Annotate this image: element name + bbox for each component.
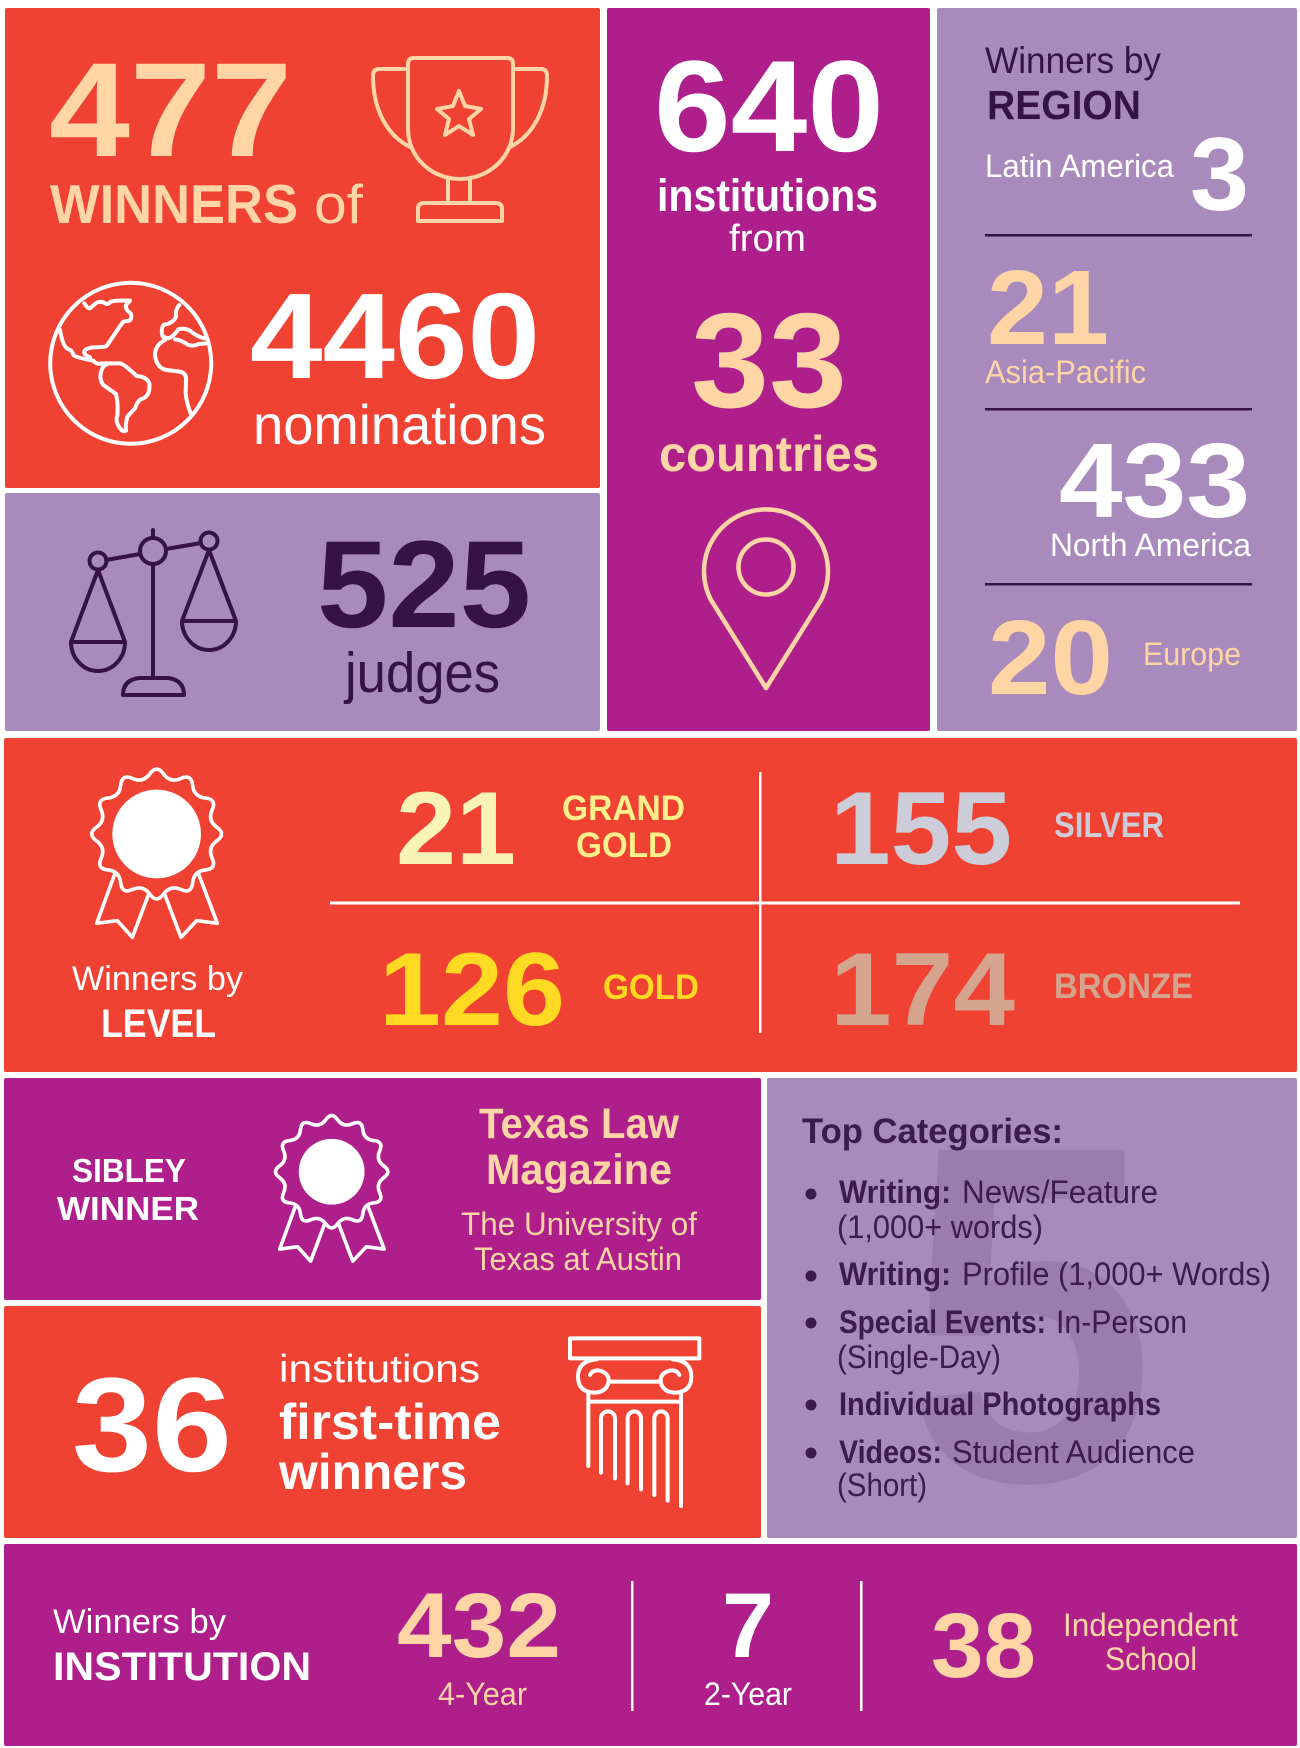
stat: silver 155	[830, 771, 1164, 887]
heading: winners by region: Winners by	[985, 40, 1161, 81]
heading: winners by institution	[53, 1603, 311, 1689]
stat: grand gold 21: 21	[396, 771, 516, 887]
list: categories: Student Audience	[952, 1434, 1195, 1470]
stat: 36 first-time winners: institutions	[279, 1348, 480, 1391]
stat: 640 institutions: institutions	[657, 170, 878, 221]
stat: grand gold 21: GRAND	[562, 789, 685, 828]
stat: 38 independent school: 38	[931, 1595, 1036, 1697]
stat: 640 institutions	[654, 33, 884, 260]
list: categories: News/Feature	[962, 1174, 1158, 1210]
text: Texas Law Magazine: Magazine	[486, 1146, 672, 1194]
heading: winners by institution: INSTITUTION	[53, 1645, 311, 1689]
icon: Sibley rosette	[275, 1116, 388, 1261]
heading: winners by level: Winners by	[72, 960, 243, 998]
stat: 7 2-year: 7	[722, 1575, 774, 1677]
stat: 477 winners	[49, 36, 364, 235]
stat: 432 4-year: 4-Year	[438, 1676, 527, 1712]
text: Texas Law Magazine	[461, 1100, 697, 1277]
panel: winners by institution	[4, 1544, 1297, 1746]
list: categories	[806, 1174, 1271, 1503]
list: categories: Individual Photographs	[839, 1386, 1161, 1422]
stat: Europe 20	[988, 599, 1241, 717]
panel: first-time winners	[4, 1306, 761, 1538]
icon: column	[570, 1338, 699, 1506]
stat: Latin America 3: 3	[1190, 117, 1249, 233]
stat: 477 winners: WINNERS	[50, 173, 298, 235]
panel: winners by region	[937, 8, 1297, 731]
stat: 525 judges: 525	[317, 516, 531, 654]
icon: trophy	[373, 58, 547, 221]
stat: 640 institutions: 640	[654, 33, 884, 179]
stat: 7 2-year	[704, 1575, 792, 1712]
panel: institutions and countries	[607, 8, 930, 731]
stat: 7 2-year: 2-Year	[704, 1676, 792, 1712]
stat: 432 4-year: 432	[397, 1575, 561, 1677]
stat: bronze 174	[830, 932, 1193, 1048]
stat: Europe 20: Europe	[1143, 636, 1241, 672]
stat: grand gold 21	[396, 771, 685, 887]
list: categories: (Short)	[837, 1467, 927, 1503]
text: Texas Law Magazine: The University of	[461, 1206, 697, 1242]
stat: 4460 nominations: 4460	[250, 268, 540, 404]
stat: 36 first-time winners: first-time	[279, 1394, 501, 1450]
heading: winners by level	[72, 960, 243, 1046]
stat: silver 155: 155	[830, 771, 1012, 887]
heading: winners by region	[985, 40, 1161, 128]
stat: gold 126: 126	[379, 932, 565, 1048]
list: categories: (1,000+ words)	[837, 1209, 1043, 1245]
panel: top categories	[767, 1045, 1297, 1582]
stat: 38 independent school: School	[1105, 1641, 1197, 1677]
panel: judges	[5, 493, 600, 731]
stat: North America 433: 433	[1059, 422, 1250, 540]
icon: globe	[50, 283, 211, 444]
heading: winners by region: REGION	[987, 82, 1141, 128]
list: categories: Writing:	[839, 1256, 951, 1292]
heading: winners by level: LEVEL	[101, 1002, 216, 1046]
stat: 36 first-time winners: winners	[278, 1444, 467, 1500]
stat: grand gold 21: GOLD	[576, 826, 672, 865]
stat: 36 first-time winners: 36	[72, 1351, 232, 1500]
stat: 477 winners: of	[314, 173, 364, 235]
stat: North America 433: North America	[1050, 527, 1251, 563]
list: categories: In-Person	[1056, 1304, 1187, 1340]
stat: Latin America 3: Latin America	[985, 148, 1174, 184]
stat: Asia-Pacific 21	[985, 249, 1146, 390]
label: Sibley winner: WINNER	[57, 1190, 199, 1227]
stat: bronze 174: BRONZE	[1054, 967, 1193, 1006]
decorative number 5: 5	[905, 1045, 1155, 1582]
stat: 33 countries: 33	[691, 285, 847, 436]
label: Sibley winner	[57, 1152, 199, 1227]
stat: 38 independent school	[931, 1595, 1238, 1697]
list: categories: Writing:	[839, 1174, 951, 1210]
stat: 38 independent school: Independent	[1063, 1607, 1238, 1643]
stat: 525 judges: judges	[343, 641, 500, 705]
stat: 640 institutions: from	[729, 218, 806, 260]
stat: bronze 174: 174	[830, 932, 1015, 1048]
panel: winners and nominations	[5, 8, 600, 488]
panel: winners by level	[4, 738, 1297, 1072]
list: categories: Profile (1,000+ Words)	[962, 1256, 1271, 1292]
stat: silver 155: SILVER	[1054, 806, 1164, 845]
stat: 4460 nominations: nominations	[253, 393, 546, 456]
stat: Asia-Pacific 21: Asia-Pacific	[985, 354, 1146, 390]
stat: 4460 nominations	[250, 268, 546, 456]
list: categories: Videos:	[839, 1434, 942, 1470]
stat: 432 4-year	[397, 1575, 561, 1712]
stat: 36 first-time winners	[72, 1348, 501, 1500]
text: Texas Law Magazine: Texas at Austin	[474, 1241, 682, 1277]
stat: 33 countries	[659, 285, 879, 482]
icon: map pin	[704, 509, 828, 688]
heading: winners by institution: Winners by	[53, 1603, 226, 1641]
text: Texas Law Magazine: Texas Law	[479, 1100, 680, 1148]
icon: award rosette	[92, 769, 222, 937]
stat: 33 countries: countries	[659, 426, 879, 482]
panel: Sibley winner	[4, 1078, 761, 1300]
stat: gold 126: GOLD	[603, 968, 699, 1007]
list: categories: Special Events:	[839, 1304, 1046, 1340]
list: categories: (Single-Day)	[837, 1339, 1001, 1375]
stat: 477 winners: 477	[49, 36, 292, 185]
stat: Latin America 3	[985, 117, 1249, 233]
label: Sibley winner: SIBLEY	[72, 1152, 186, 1189]
stat: Europe 20: 20	[988, 599, 1113, 717]
icon: scales of justice	[71, 530, 236, 695]
heading: top categories: Top Categories:	[802, 1112, 1063, 1151]
stat: Asia-Pacific 21: 21	[987, 249, 1109, 367]
stat: gold 126	[379, 932, 699, 1048]
